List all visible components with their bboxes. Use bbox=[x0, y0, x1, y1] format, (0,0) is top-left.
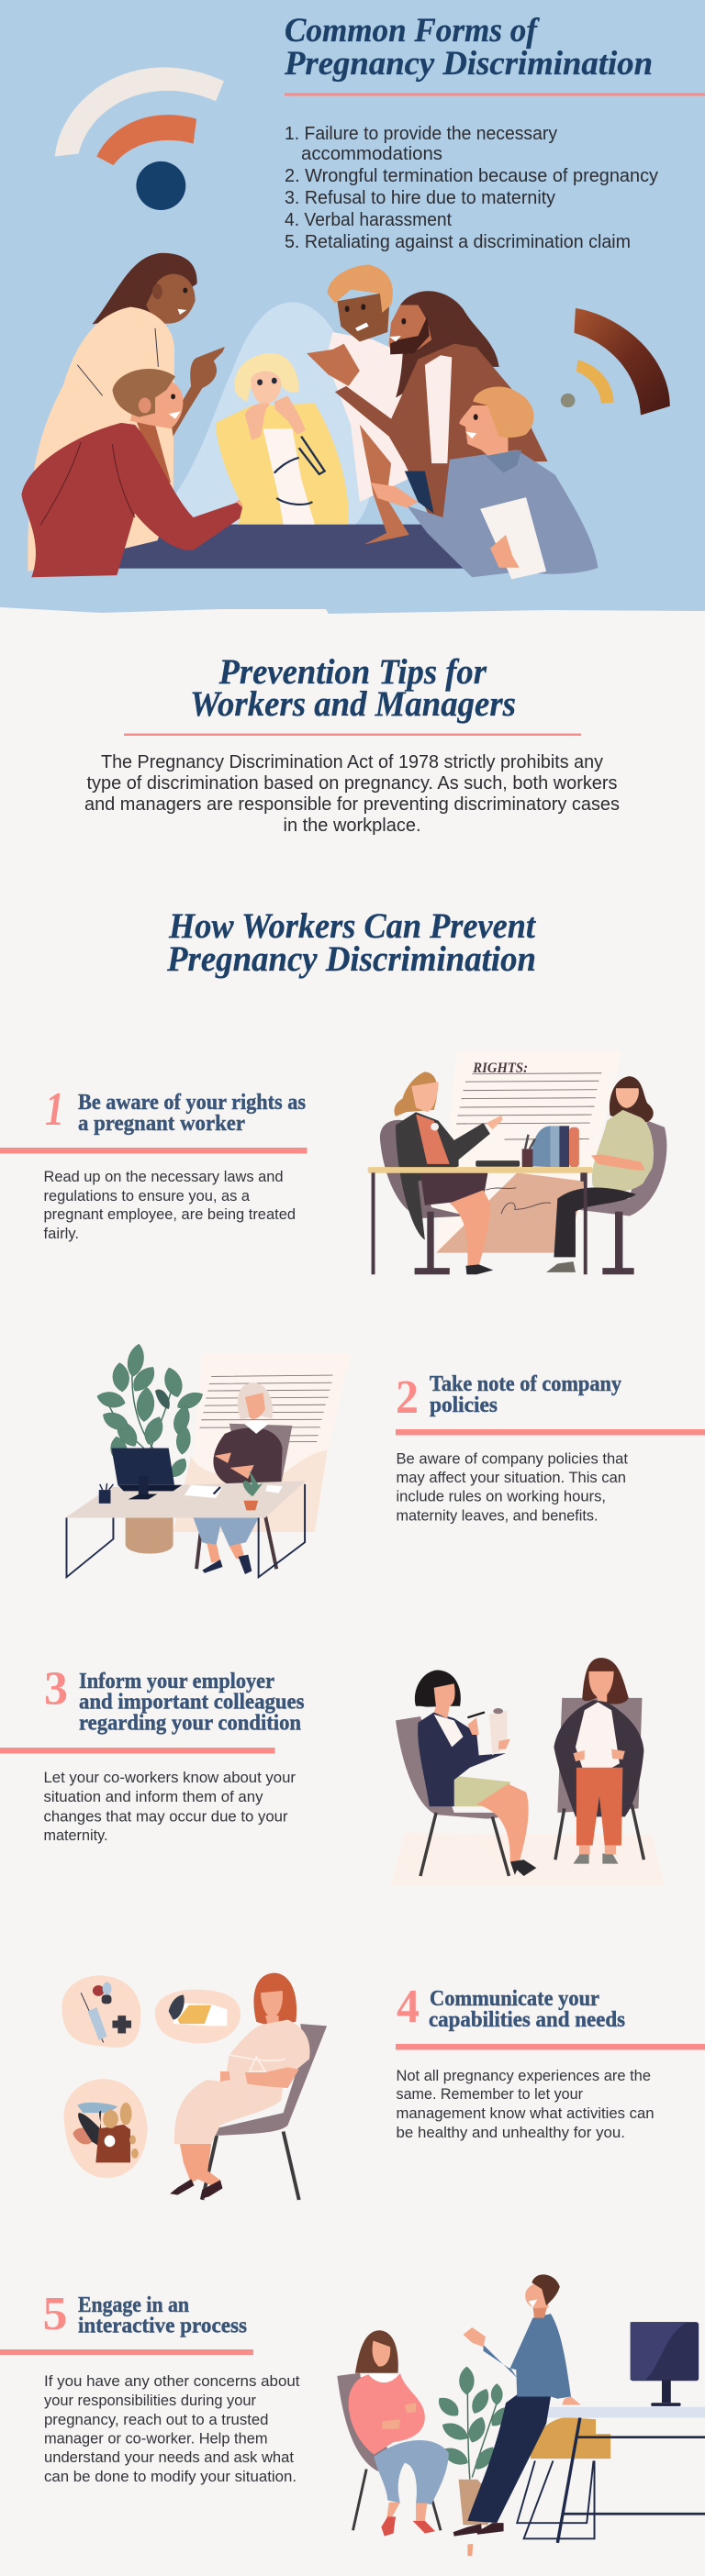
rights document bbox=[436, 1051, 621, 1253]
person: woman in yellow jacket bbox=[216, 353, 349, 525]
desk with stool bbox=[517, 2407, 705, 2543]
number 1: 1 bbox=[45, 1083, 64, 1136]
plant bbox=[95, 1343, 207, 1480]
panel: step 1 bbox=[0, 1083, 307, 1242]
standing man bbox=[453, 2274, 581, 2537]
step 3 text: Let your co-workers know about your bbox=[44, 1769, 296, 1786]
step 2 heading: Take note of company bbox=[430, 1372, 621, 1396]
heading: prevention tips: Prevention Tips for bbox=[218, 652, 487, 692]
illustration: woman seated and man leaning on desk bbox=[337, 2274, 705, 2556]
number 4: 4 bbox=[397, 1981, 420, 2033]
step 4 text: same. Remember to let your bbox=[397, 2085, 583, 2103]
plant bbox=[434, 2367, 514, 2525]
step 5 text: manager or co-worker. Help them bbox=[44, 2429, 268, 2448]
person: woman pointing bbox=[28, 253, 225, 572]
person: man in white shirt bbox=[307, 264, 425, 544]
text block: list of common forms: 4. Verbal harassment bbox=[285, 210, 452, 230]
interviewer with clipboard bbox=[396, 1671, 536, 1876]
rights document: RIGHTS: bbox=[472, 1060, 528, 1076]
step 1 text: regulations to ensure you, as a bbox=[44, 1187, 251, 1205]
illustration: pregnant woman with health bubbles bbox=[62, 1973, 327, 2200]
step 5 heading: Engage in an bbox=[78, 2293, 189, 2317]
illustration: arguing coworkers around a table bbox=[22, 253, 598, 579]
panel: step 5 bbox=[0, 2288, 300, 2485]
heading: prevention tips: Workers and Managers bbox=[190, 684, 516, 724]
step 5 heading: interactive process bbox=[78, 2314, 247, 2337]
illustration: woman at a desk with a plant bbox=[65, 1343, 351, 1577]
heading: prevention tips bbox=[190, 652, 516, 724]
step 2 heading bbox=[430, 1372, 621, 1417]
person: man in blue shirt with tablet bbox=[371, 386, 598, 579]
bubble: medicine bbox=[62, 1975, 140, 2048]
heading: how workers can prevent bbox=[166, 906, 536, 979]
panel: step 4 bbox=[396, 1981, 705, 2141]
step 2 text: Be aware of company policies that bbox=[397, 1449, 628, 1468]
step 3 text: maternity. bbox=[44, 1827, 108, 1844]
text block: list of common forms bbox=[285, 124, 658, 252]
step 5 text: pregnancy, reach out to a trusted bbox=[44, 2411, 268, 2428]
person: man in red bbox=[22, 369, 281, 577]
number 2: 2 bbox=[396, 1371, 419, 1424]
person: bearded man in brown jacket bbox=[335, 291, 548, 521]
step 3 text: changes that may occur due to your bbox=[44, 1807, 288, 1826]
step 5 text bbox=[44, 2372, 300, 2485]
title: common forms bbox=[284, 12, 653, 83]
step 2 text: maternity leaves, and benefits. bbox=[397, 1506, 599, 1525]
step 5 text: can be done to modify your situation. bbox=[44, 2468, 297, 2485]
step 3 text: situation and inform them of any bbox=[44, 1788, 263, 1805]
illustration: two women talking in chairs bbox=[390, 1658, 665, 1886]
pregnant woman standing before chair bbox=[554, 1658, 643, 1864]
right woman and chair bbox=[546, 1076, 666, 1274]
step 4 heading bbox=[429, 1987, 625, 2032]
step 5 heading bbox=[78, 2293, 247, 2337]
chair bbox=[202, 2024, 327, 2200]
text block: prevention intro: and managers are responsible for preventing discriminatory cases bbox=[84, 794, 620, 815]
rug bbox=[390, 1833, 665, 1886]
step 2 text bbox=[397, 1449, 628, 1525]
number 5: 5 bbox=[42, 2288, 68, 2340]
step 2 text: include rules on working hours, bbox=[397, 1488, 606, 1505]
text block: list of common forms: accommodations bbox=[301, 144, 442, 164]
small decorative stroke bbox=[467, 2544, 473, 2556]
seated pregnant woman bbox=[170, 1973, 310, 2199]
step 1 heading bbox=[78, 1091, 306, 1136]
step 4 text: management know what activities can bbox=[397, 2104, 654, 2122]
policy document bbox=[173, 1354, 351, 1532]
text block: prevention intro: type of discrimination based on pregnancy. As such, both workers bbox=[86, 773, 617, 794]
step 4 text: Not all pregnancy experiences are the bbox=[397, 2067, 651, 2084]
step 3 heading: regarding your condition bbox=[79, 1712, 301, 1736]
number 3: 3 bbox=[44, 1662, 68, 1715]
title: common forms: Common Forms of bbox=[285, 12, 540, 50]
step 2 heading: policies bbox=[430, 1393, 498, 1417]
text block: prevention intro bbox=[84, 752, 620, 836]
panel: step 2 bbox=[396, 1371, 705, 1525]
woman and chair bbox=[194, 1382, 292, 1574]
step 4 heading: Communicate your bbox=[430, 1987, 599, 2011]
step 3 heading bbox=[79, 1670, 305, 1736]
monitor bbox=[631, 2322, 699, 2406]
icon: decorative arcs and dot right bbox=[561, 308, 670, 415]
heading: how workers can prevent: How Workers Can Prevent bbox=[168, 906, 536, 946]
title: common forms: Pregnancy Discrimination bbox=[284, 45, 653, 83]
pot bbox=[126, 1517, 173, 1554]
step 3 heading: and important colleagues bbox=[79, 1690, 305, 1714]
seated woman bbox=[337, 2330, 449, 2537]
left woman and chair bbox=[380, 1071, 503, 1274]
bubble: food bbox=[64, 2079, 148, 2178]
step 1 text: pregnant employee, are being treated bbox=[44, 1205, 296, 1223]
step 1 text: fairly. bbox=[44, 1225, 79, 1242]
step 4 heading: capabilities and needs bbox=[429, 2008, 625, 2032]
step 1 text: Read up on the necessary laws and bbox=[44, 1168, 283, 1185]
bubble: bed bbox=[155, 1990, 241, 2043]
desk with monitor bbox=[65, 1449, 306, 1577]
text block: prevention intro: The Pregnancy Discrimination Act of 1978 strictly prohibits any bbox=[101, 752, 603, 772]
text block: list of common forms: 1. Failure to provide the necessary bbox=[285, 124, 557, 144]
step 1 heading: a pregnant worker bbox=[78, 1112, 245, 1136]
text block: list of common forms: 5. Retaliating against a discrimination claim bbox=[285, 232, 631, 252]
panel: blue header background bbox=[0, 0, 705, 614]
icon: decorative arcs and dot upper left bbox=[55, 67, 224, 210]
step 1 text bbox=[44, 1168, 296, 1242]
step 3 heading: Inform your employer bbox=[79, 1670, 274, 1693]
panel: step 3 bbox=[0, 1662, 305, 1844]
heading: how workers can prevent: Pregnancy Discrimination bbox=[166, 939, 536, 979]
text block: prevention intro: in the workplace. bbox=[283, 816, 420, 836]
step 2 text: may affect your situation. This can bbox=[397, 1469, 626, 1486]
desk, binders and pen cup bbox=[368, 1126, 593, 1274]
step 5 text: If you have any other concerns about bbox=[44, 2372, 300, 2390]
step 1 heading: Be aware of your rights as bbox=[78, 1091, 306, 1115]
text block: list of common forms: 3. Refusal to hire due to maternity bbox=[285, 188, 555, 208]
illustration: rights meeting at a desk bbox=[368, 1051, 666, 1274]
step 5 text: your responsibilities during your bbox=[44, 2392, 256, 2409]
step 3 text bbox=[44, 1769, 296, 1844]
step 4 text bbox=[397, 2067, 654, 2141]
text block: list of common forms: 2. Wrongful termination because of pregnancy bbox=[285, 166, 658, 186]
step 5 text: understand your needs and ask what bbox=[44, 2448, 294, 2466]
step 4 text: be healthy and unhealthy for you. bbox=[397, 2124, 625, 2141]
table bbox=[110, 525, 499, 569]
